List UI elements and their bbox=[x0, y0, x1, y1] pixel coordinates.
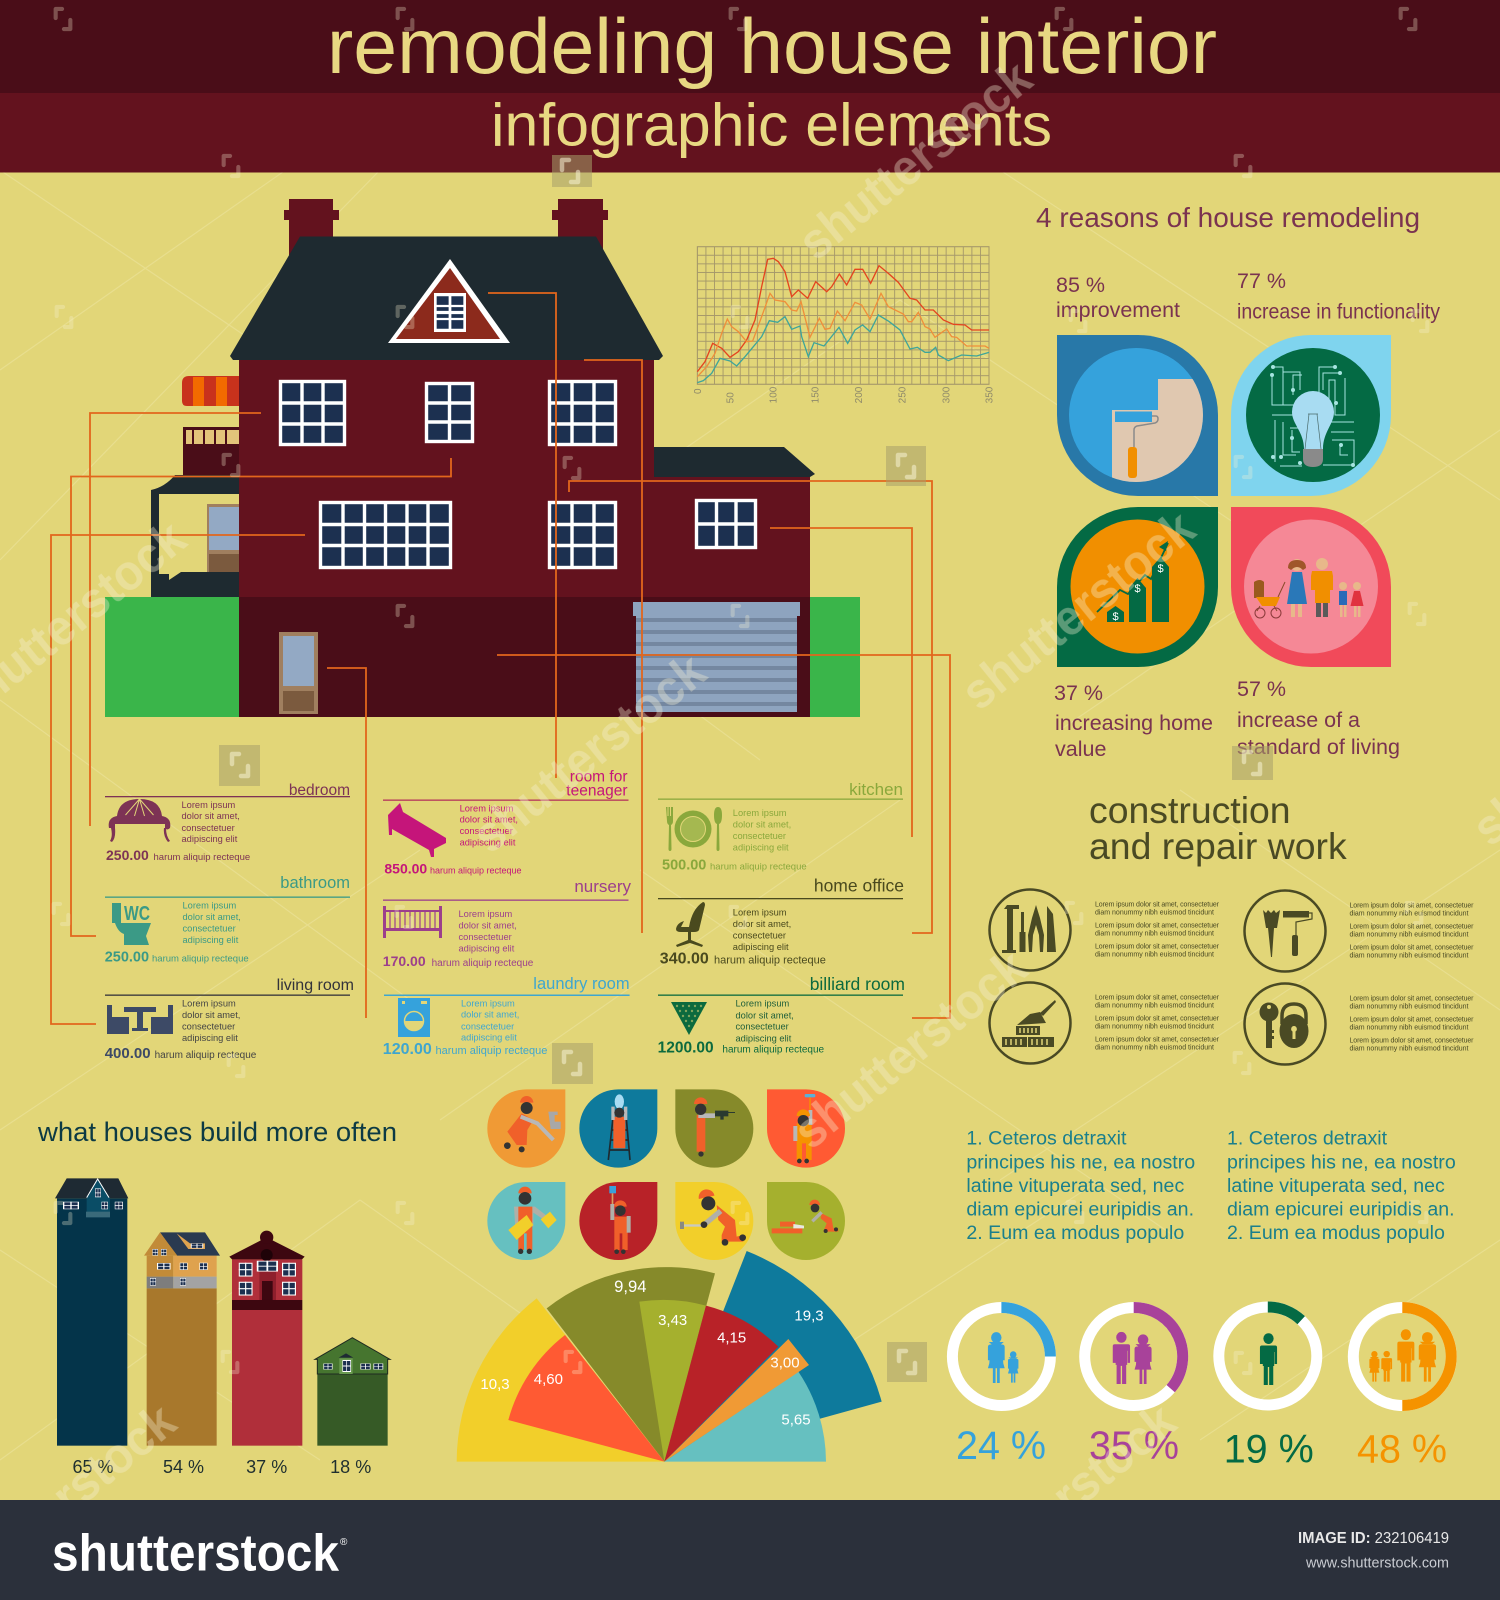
son bbox=[1339, 582, 1347, 617]
bar percent labels: 54 % bbox=[163, 1457, 204, 1477]
watermark wordmarks: shutterstock bbox=[951, 499, 1205, 721]
chart axis labels: 50 bbox=[726, 392, 737, 403]
chimneys bbox=[284, 199, 608, 255]
chart axis labels: 100 bbox=[768, 386, 779, 403]
chart axis labels: 150 bbox=[811, 386, 822, 403]
card: bathroom: harum aliquip recteque bbox=[152, 954, 249, 965]
reason text: functionality bbox=[1237, 269, 1440, 324]
wedge 4,60 bbox=[508, 1335, 664, 1462]
icon: crib bbox=[383, 906, 442, 938]
card: bedroom: Lorem ipsum bbox=[182, 800, 235, 810]
construction text: top left bbox=[1095, 901, 1220, 959]
bar: 54 percent bbox=[144, 1232, 220, 1446]
card: billiard room: adipiscing elit bbox=[736, 1033, 792, 1043]
header bbox=[0, 0, 1500, 172]
construction text: top left: diam nonummy nibh euismod tincidunt bbox=[1095, 952, 1214, 959]
card: billiard room: 1200.00 bbox=[658, 1040, 714, 1057]
bar percent labels: 18 % bbox=[330, 1457, 371, 1477]
watermark badges bbox=[219, 155, 1273, 1382]
bar percent labels bbox=[72, 1457, 371, 1477]
card: bathroom bbox=[105, 874, 350, 966]
icon: washing machine bbox=[398, 998, 430, 1037]
card: living room: adipiscing elit bbox=[182, 1033, 238, 1043]
text column left: latine vituperata sed, nec bbox=[966, 1175, 1184, 1197]
card: kitchen: Lorem ipsum bbox=[733, 808, 787, 818]
panel: construction and repair work bbox=[990, 789, 1474, 1064]
roof bbox=[230, 236, 663, 360]
card: living room: harum aliquip recteque bbox=[155, 1050, 257, 1061]
bar: 18 percent bbox=[315, 1338, 390, 1446]
construction text: top left: diam nonummy nibh euismod tincidunt bbox=[1095, 910, 1214, 917]
card: bedroom: harum aliquip recteque bbox=[154, 852, 250, 863]
houses heading: what houses build more often bbox=[37, 1117, 397, 1147]
card: room for teenager bbox=[383, 769, 628, 876]
construction text: top left: Lorem ipsum dolor sit amet, consectetuer bbox=[1095, 922, 1220, 929]
card: billiard room: dolor sit amet, bbox=[736, 1010, 794, 1020]
reason text: improvement bbox=[1056, 273, 1180, 322]
reason text: standard of living: standard of living bbox=[1237, 735, 1400, 759]
chart axis labels: 250 bbox=[897, 386, 908, 403]
card: laundry room: harum aliquip recteque bbox=[436, 1045, 547, 1057]
fan chart bbox=[457, 1251, 882, 1462]
leaf: home value: $ bbox=[1112, 611, 1119, 623]
worker badge: roller bbox=[767, 1089, 845, 1168]
card: bedroom: consectetuer bbox=[182, 823, 235, 833]
card: nursery: harum aliquip recteque bbox=[432, 958, 534, 969]
garage door bbox=[633, 602, 800, 712]
construction text: top right bbox=[1350, 902, 1474, 960]
donut 35 percent: 35 % bbox=[1089, 1424, 1179, 1468]
reason text: home value: value bbox=[1055, 737, 1106, 761]
text column left: diam epicurei euripidis an. bbox=[966, 1199, 1194, 1221]
lawn bbox=[105, 597, 860, 717]
wedge 3,43 bbox=[639, 1300, 706, 1462]
panel: what houses build more often bbox=[37, 1117, 397, 1477]
card: nursery: consectetuer bbox=[458, 932, 512, 942]
icon: plate and cutlery bbox=[666, 807, 722, 851]
construction heading bbox=[1089, 789, 1347, 867]
chart axis labels: 200 bbox=[854, 386, 865, 403]
watermark wordmarks: shutterstock bbox=[462, 642, 716, 864]
icon: sofa bbox=[109, 799, 170, 842]
card: room for teenager: room for bbox=[570, 769, 628, 786]
windows bbox=[279, 380, 757, 569]
text column right: diam epicurei euripidis an. bbox=[1227, 1199, 1455, 1221]
construction text: bottom left: Lorem ipsum dolor sit amet, consectetuer bbox=[1095, 1036, 1220, 1043]
card: home office: consectetuer bbox=[733, 930, 786, 940]
card: living room bbox=[105, 977, 354, 1062]
fan chart values: 4,60 bbox=[534, 1371, 563, 1388]
donut 48 percent: 48 % bbox=[1357, 1428, 1447, 1472]
worker badge: inspector bbox=[487, 1182, 565, 1260]
leaf: home value bbox=[1057, 507, 1218, 667]
chart axis labels: 0 bbox=[693, 388, 704, 394]
donut 19 percent bbox=[1219, 1307, 1317, 1472]
subtitle: infographic elements bbox=[491, 92, 1052, 158]
card: room for teenager: Lorem ipsum bbox=[460, 803, 514, 813]
card: billiard room bbox=[658, 974, 905, 1057]
card: living room: living room bbox=[277, 977, 354, 994]
card: room for teenager: 850.00 bbox=[384, 860, 427, 876]
card: laundry room bbox=[383, 975, 630, 1058]
card: bathroom: dolor sit amet, bbox=[182, 912, 241, 922]
wedge 5,65 bbox=[664, 1372, 826, 1462]
card: bedroom: bedroom bbox=[289, 782, 350, 799]
card: home office: Lorem ipsum bbox=[733, 908, 787, 918]
construction text: bottom left: Lorem ipsum dolor sit amet, consectetuer bbox=[1095, 1015, 1220, 1022]
text column left: principes his ne, ea nostro bbox=[966, 1151, 1195, 1173]
card: home office: 340.00 bbox=[660, 950, 709, 967]
construction text: bottom right: diam nonummy nibh euismod tincidunt bbox=[1350, 1046, 1469, 1053]
house illustration bbox=[105, 199, 860, 717]
fan chart values: 9,94 bbox=[614, 1277, 647, 1296]
card: billiard room: Lorem ipsum bbox=[736, 999, 789, 1009]
fan chart values: 10,3 bbox=[480, 1376, 510, 1393]
construction text: top right: diam nonummy nibh euismod tincidunt bbox=[1350, 953, 1469, 960]
icon: office chair bbox=[676, 902, 705, 947]
card: kitchen: consectetuer bbox=[733, 831, 786, 841]
reason text: functionality: 77 % bbox=[1237, 269, 1286, 293]
construction text: bottom right bbox=[1350, 995, 1474, 1053]
icon: WC toilet: WC bbox=[124, 903, 150, 925]
donut 24 percent bbox=[952, 1308, 1050, 1468]
chart grid bbox=[697, 247, 989, 384]
icon: billiard triangle bbox=[671, 1002, 707, 1035]
fan chart values: 3,43 bbox=[658, 1312, 687, 1329]
reasons heading: 4 reasons of house remodeling bbox=[1036, 202, 1420, 233]
reason text: home value: 37 % bbox=[1054, 681, 1103, 705]
card: room for teenager: teenager bbox=[566, 783, 628, 800]
reason text: home value: increasing home bbox=[1055, 711, 1213, 735]
icon: WC toilet bbox=[112, 903, 151, 945]
chart axis labels: 300 bbox=[941, 386, 952, 403]
icon: trowel and bricks bbox=[990, 982, 1070, 1064]
leaf: family bbox=[1231, 507, 1391, 667]
card: kitchen: adipiscing elit bbox=[733, 842, 789, 852]
card: bedroom: dolor sit amet, bbox=[182, 811, 240, 821]
wedge 10,3 bbox=[457, 1298, 664, 1462]
card: nursery bbox=[383, 877, 631, 969]
card: kitchen: dolor sit amet, bbox=[733, 819, 791, 829]
construction text: top left: diam nonummy nibh euismod tincidunt bbox=[1095, 931, 1214, 938]
card: bathroom: consectetuer bbox=[182, 924, 236, 934]
fan chart values: 19,3 bbox=[794, 1308, 824, 1325]
card: laundry room: 120.00 bbox=[383, 1041, 432, 1058]
construction text: top left: Lorem ipsum dolor sit amet, consectetuer bbox=[1095, 901, 1220, 908]
card: laundry room: laundry room bbox=[533, 975, 630, 993]
leaf: home value: $ bbox=[1157, 563, 1164, 575]
card: room for teenager: dolor sit amet, bbox=[460, 815, 518, 825]
card: room for teenager: harum aliquip recteque bbox=[430, 865, 522, 875]
dormer bbox=[388, 259, 510, 343]
father bbox=[1311, 558, 1333, 617]
card: nursery: dolor sit amet, bbox=[458, 920, 517, 930]
card: bathroom: 250.00 bbox=[105, 950, 149, 966]
construction text: bottom left: diam nonummy nibh euismod tincidunt bbox=[1095, 1003, 1214, 1010]
title: remodeling house interior bbox=[327, 2, 1217, 90]
card: billiard room: billiard room bbox=[810, 974, 905, 994]
card: living room: consectetuer bbox=[182, 1021, 235, 1031]
card: home office: harum aliquip recteque bbox=[714, 954, 826, 966]
text column right: principes his ne, ea nostro bbox=[1227, 1151, 1456, 1173]
bar: 37 percent bbox=[229, 1231, 305, 1446]
stroller bbox=[1254, 580, 1285, 618]
fan chart values: 4,15 bbox=[717, 1330, 746, 1347]
reason text: standard of living: 57 % bbox=[1237, 677, 1286, 701]
construction text: top right: Lorem ipsum dolor sit amet, consectetuer bbox=[1350, 923, 1474, 930]
card: laundry room: consectetuer bbox=[461, 1021, 514, 1031]
wedge 9,94 bbox=[547, 1267, 715, 1462]
construction text: top right: diam nonummy nibh euismod tincidunt bbox=[1350, 911, 1469, 918]
image id: IMAGE ID: 232106419 bbox=[1298, 1530, 1449, 1547]
bar: 65 percent bbox=[55, 1178, 128, 1446]
card: home office: dolor sit amet, bbox=[733, 919, 791, 929]
text column right: 2. Eum ea modus populo bbox=[1227, 1222, 1445, 1244]
extension bbox=[654, 477, 810, 597]
construction text: bottom right: diam nonummy nibh euismod tincidunt bbox=[1350, 1025, 1469, 1032]
ground floor bbox=[239, 597, 810, 717]
line chart bbox=[693, 247, 996, 403]
construction text: bottom right: Lorem ipsum dolor sit amet, consectetuer bbox=[1350, 1037, 1474, 1044]
card: laundry room: dolor sit amet, bbox=[461, 1010, 519, 1020]
worker badge: ladder bbox=[579, 1089, 657, 1168]
text column left bbox=[966, 1127, 1195, 1244]
icon: dining table bbox=[107, 1005, 173, 1034]
fan chart values bbox=[480, 1277, 824, 1428]
construction heading: construction bbox=[1089, 789, 1291, 831]
reason text: improvement: improvement bbox=[1056, 298, 1180, 322]
donut charts bbox=[952, 1307, 1451, 1472]
orange line bbox=[697, 293, 989, 377]
construction text: bottom right: Lorem ipsum dolor sit amet, consectetuer bbox=[1350, 1016, 1474, 1023]
website: www.shutterstock.com bbox=[1305, 1556, 1449, 1572]
card: kitchen: kitchen bbox=[849, 780, 903, 799]
reason text: functionality: increase in functionality bbox=[1237, 300, 1440, 324]
construction text: bottom left: Lorem ipsum dolor sit amet, consectetuer bbox=[1095, 994, 1220, 1001]
card: nursery: adipiscing elit bbox=[458, 943, 515, 953]
construction text: top left: Lorem ipsum dolor sit amet, consectetuer bbox=[1095, 943, 1220, 950]
chart axis labels bbox=[693, 386, 996, 403]
card: nursery: nursery bbox=[574, 877, 631, 896]
donut 35 percent bbox=[1085, 1308, 1183, 1468]
card: home office: home office bbox=[814, 876, 904, 896]
leaf: light bulb bbox=[1231, 335, 1391, 496]
card: laundry room: Lorem ipsum bbox=[461, 998, 515, 1008]
worker badge: plumber bbox=[487, 1089, 565, 1168]
icon: brush and roller bbox=[1244, 890, 1326, 972]
fan chart values: 3,00 bbox=[770, 1355, 800, 1372]
card: nursery: Lorem ipsum bbox=[458, 909, 512, 919]
extension roof bbox=[654, 447, 815, 477]
card: nursery: 170.00 bbox=[383, 953, 426, 969]
card: bathroom: adipiscing elit bbox=[182, 935, 239, 945]
construction text: bottom right: diam nonummy nibh euismod tincidunt bbox=[1350, 1004, 1469, 1011]
card: billiard room: consectetuer bbox=[736, 1022, 789, 1032]
icon: hand tools bbox=[990, 890, 1070, 970]
card: kitchen: 500.00 bbox=[662, 857, 706, 873]
worker badge: bricklayer bbox=[767, 1182, 845, 1260]
worker badge: hammer bbox=[675, 1182, 753, 1260]
house bar chart bbox=[55, 1178, 390, 1446]
text column left: 1. Ceteros detraxit bbox=[966, 1127, 1127, 1149]
card: room for teenager: adipiscing elit bbox=[460, 838, 516, 848]
red line bbox=[697, 258, 989, 372]
construction heading: and repair work bbox=[1089, 825, 1347, 867]
card: home office bbox=[658, 876, 904, 967]
reason text: home value bbox=[1054, 681, 1213, 761]
fan chart values: 5,65 bbox=[781, 1411, 811, 1428]
worker icons and fan chart bbox=[457, 1089, 882, 1462]
teal line bbox=[697, 315, 989, 383]
reason text: standard of living: increase of a bbox=[1237, 708, 1360, 732]
construction text: bottom left: diam nonummy nibh euismod tincidunt bbox=[1095, 1024, 1214, 1031]
wedge 4,15 bbox=[664, 1306, 778, 1462]
chart axis labels: 350 bbox=[985, 386, 996, 403]
watermark corner marks bbox=[232, 160, 1260, 1373]
card: room for teenager: consectetuer bbox=[460, 826, 513, 836]
card: kitchen bbox=[658, 780, 903, 873]
front door bbox=[279, 632, 318, 714]
connector lines bbox=[51, 293, 950, 1024]
worker badge: brush bbox=[579, 1182, 657, 1260]
bar percent labels: 37 % bbox=[246, 1457, 287, 1477]
porch and balcony bbox=[151, 376, 239, 597]
donut 19 percent: 19 % bbox=[1224, 1428, 1314, 1472]
donut 24 percent: 24 % bbox=[956, 1424, 1046, 1468]
mother bbox=[1287, 559, 1307, 617]
construction text: top right: Lorem ipsum dolor sit amet, consectetuer bbox=[1350, 944, 1474, 951]
main body bbox=[239, 360, 654, 597]
construction text: bottom right: Lorem ipsum dolor sit amet, consectetuer bbox=[1350, 995, 1474, 1002]
leaf: home value: $ bbox=[1134, 583, 1141, 595]
bar percent labels: 65 % bbox=[72, 1457, 114, 1477]
wedge 3,00 bbox=[664, 1339, 809, 1462]
card: living room: dolor sit amet, bbox=[182, 1010, 240, 1020]
card: laundry room: adipiscing elit bbox=[461, 1033, 517, 1043]
footer registered mark: ® bbox=[340, 1537, 348, 1548]
donut 48 percent bbox=[1353, 1308, 1451, 1472]
card: home office: adipiscing elit bbox=[733, 942, 789, 952]
leaf: paint roller bbox=[1057, 335, 1218, 496]
card: bedroom bbox=[105, 782, 350, 863]
construction text: bottom left bbox=[1095, 994, 1220, 1052]
card: bathroom: bathroom bbox=[280, 874, 350, 892]
panel: lorem text columns bbox=[966, 1127, 1456, 1244]
room cards bbox=[105, 769, 905, 1062]
text column right bbox=[1227, 1127, 1456, 1244]
watermark wordmarks: shutterstock bbox=[783, 938, 1037, 1160]
text column right: 1. Ceteros detraxit bbox=[1227, 1127, 1388, 1149]
icon: bed bbox=[388, 803, 446, 857]
footer bar bbox=[0, 1500, 1500, 1600]
text column right: latine vituperata sed, nec bbox=[1227, 1175, 1445, 1197]
card: billiard room: harum aliquip recteque bbox=[722, 1045, 825, 1056]
construction text: bottom left: diam nonummy nibh euismod tincidunt bbox=[1095, 1045, 1214, 1052]
construction text: top right: Lorem ipsum dolor sit amet, consectetuer bbox=[1350, 902, 1474, 909]
reason text: improvement: 85 % bbox=[1056, 273, 1105, 297]
card: kitchen: harum aliquip recteque bbox=[710, 861, 807, 872]
wedge 19,3 bbox=[664, 1251, 882, 1462]
card: living room: Lorem ipsum bbox=[182, 999, 236, 1009]
watermark wordmarks: shutterstock bbox=[788, 49, 1042, 271]
worker badge: drill bbox=[675, 1089, 753, 1168]
card: bathroom: Lorem ipsum bbox=[182, 901, 236, 911]
icon: key and lock bbox=[1244, 984, 1326, 1064]
footer logo: shutterstock bbox=[52, 1525, 339, 1583]
reason text: standard of living bbox=[1237, 677, 1400, 759]
text column left: 2. Eum ea modus populo bbox=[966, 1222, 1184, 1244]
panel: 4 reasons of house remodeling bbox=[1036, 202, 1440, 761]
daughter bbox=[1350, 582, 1364, 617]
card: living room: 400.00 bbox=[105, 1045, 151, 1062]
card: bedroom: 250.00 bbox=[106, 847, 149, 863]
card: bedroom: adipiscing elit bbox=[182, 834, 238, 844]
construction text: top right: diam nonummy nibh euismod tincidunt bbox=[1350, 932, 1469, 939]
